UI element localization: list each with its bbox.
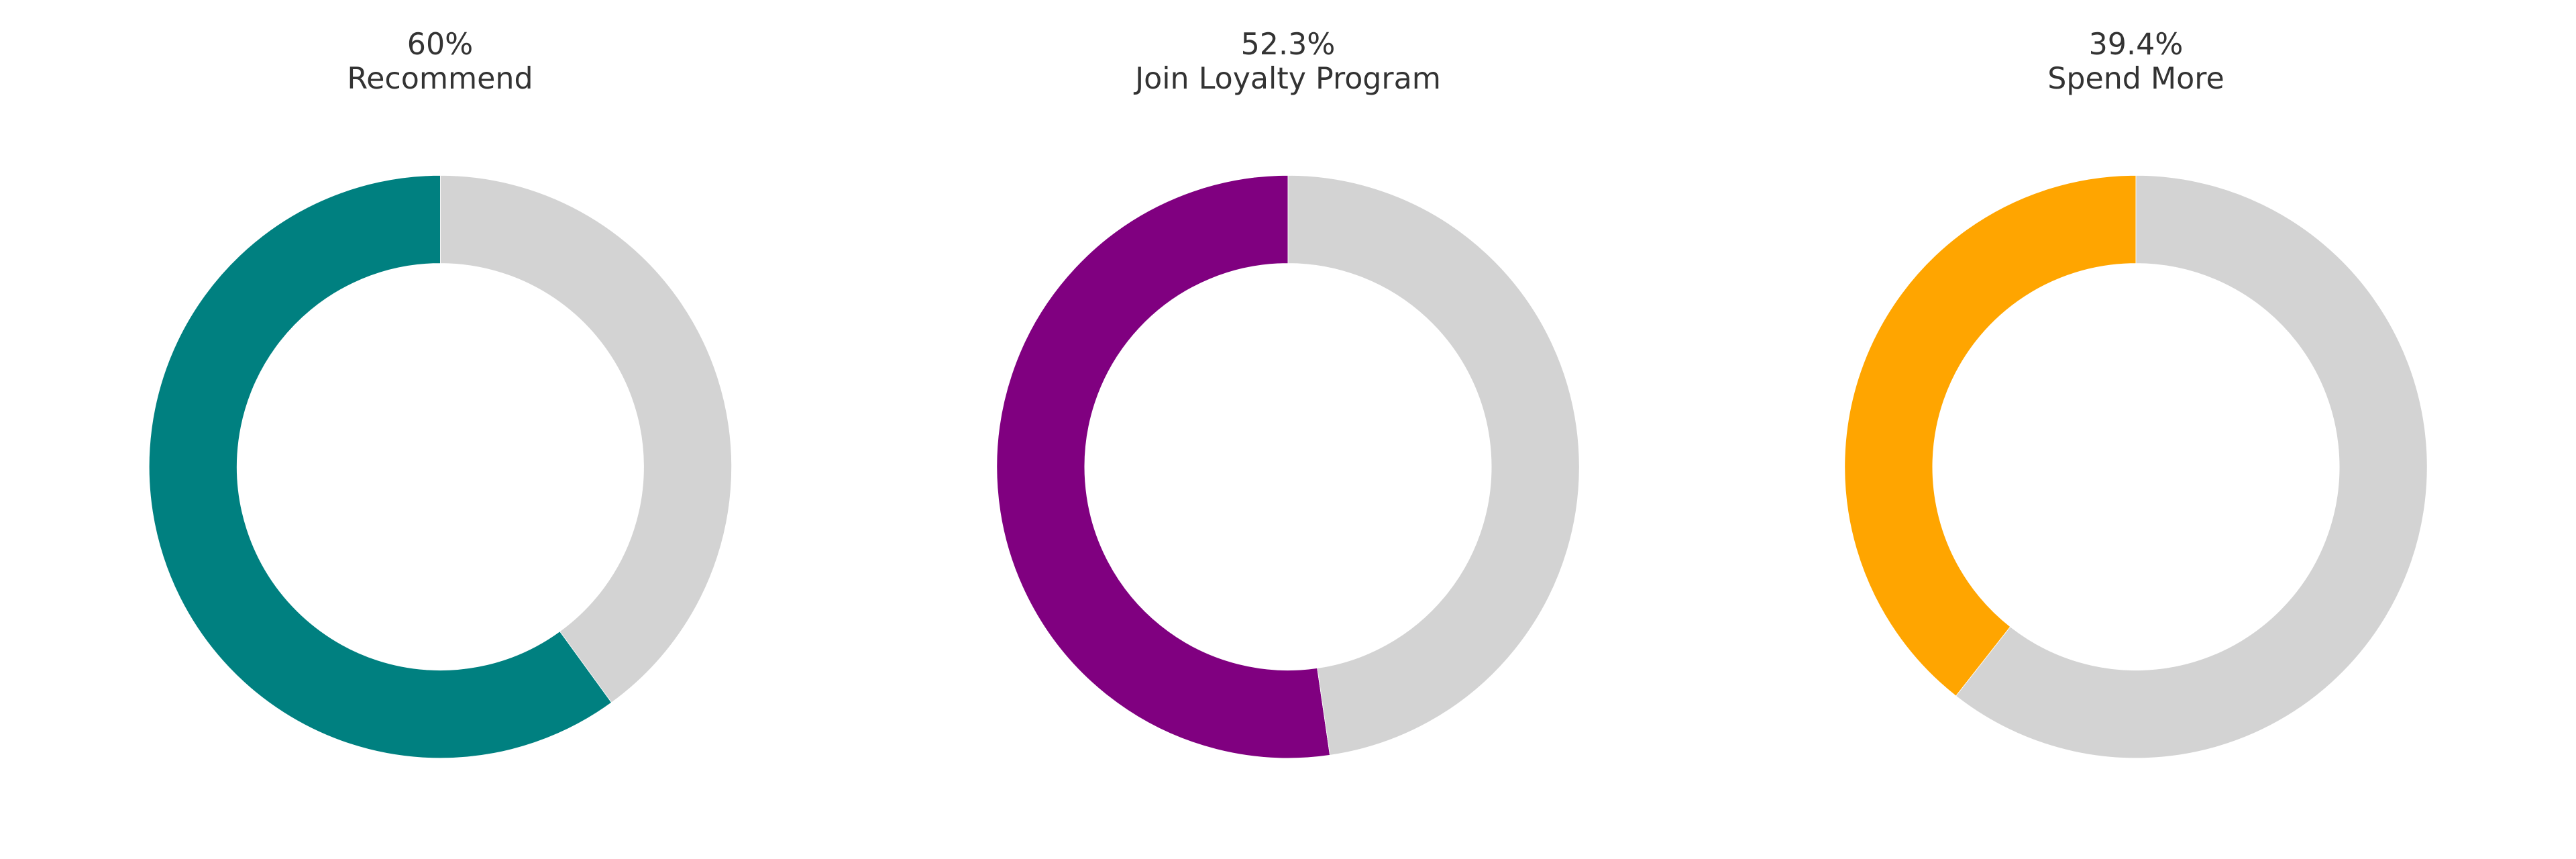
heading: 39.4% Spend More — [2047, 28, 2224, 96]
heading: 39.4% Spend More: 39.4% — [2089, 28, 2183, 62]
segment: remainder gray — [1288, 175, 1579, 755]
heading: 60% Recommend — [347, 28, 533, 96]
segment: remainder gray — [440, 175, 732, 703]
panel: Recommend donut — [149, 28, 732, 758]
heading: 52.3% Join Loyalty Program — [1133, 28, 1441, 96]
segment: 60% teal — [149, 175, 612, 758]
donut chart: 39.4% Spend More — [1845, 175, 2427, 758]
segment: 52.3% purple — [997, 175, 1330, 758]
panel: Spend More donut — [1845, 28, 2427, 758]
donut chart: 60% Recommend — [149, 175, 732, 758]
segment: remainder gray — [1956, 175, 2427, 758]
segment: 39.4% orange — [1845, 175, 2136, 696]
heading: 52.3% Join Loyalty Program: Join Loyalty Program — [1133, 62, 1441, 96]
donut chart: 52.3% Join Loyalty Program — [997, 175, 1579, 758]
heading: 39.4% Spend More: Spend More — [2047, 62, 2224, 96]
panel: Join Loyalty Program donut — [997, 28, 1579, 758]
heading: 52.3% Join Loyalty Program: 52.3% — [1241, 28, 1335, 62]
heading: 60% Recommend: 60% — [407, 28, 473, 62]
heading: 60% Recommend: Recommend — [347, 62, 533, 96]
